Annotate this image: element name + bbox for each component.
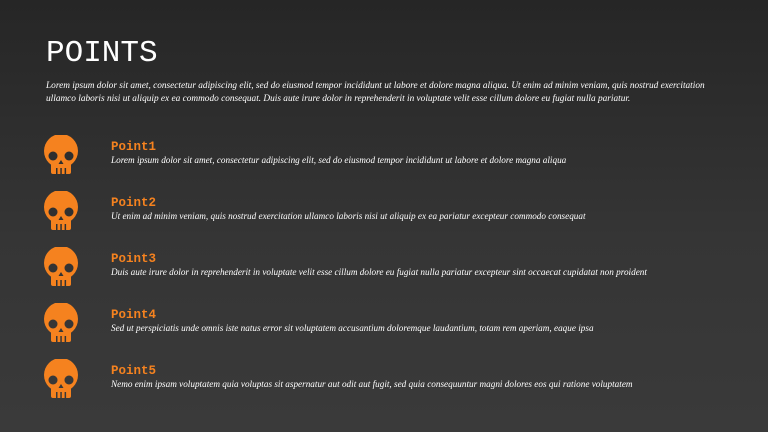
point 2: Point2	[111, 196, 156, 210]
point 5: Nemo enim ipsam voluptatem quia voluptas sit aspernatur aut odit aut fugit, sed quia consequuntur magni dolores eos qui ratione voluptatem	[111, 379, 633, 389]
point 4: Point4	[111, 308, 156, 322]
point 1: Lorem ipsum dolor sit amet, consectetur adipiscing elit, sed do eiusmod tempor incididunt ut labore et dolore magna aliqua	[111, 155, 566, 165]
point 1	[44, 135, 566, 174]
point 3	[44, 247, 648, 286]
point 4: Sed ut perspiciatis unde omnis iste natus error sit voluptatem accusantium doloremque laudantium, totam rem aperiam, eaque ipsa	[111, 323, 594, 333]
point 3: Duis aute irure dolor in reprehenderit in voluptate velit esse cillum dolore eu fugiat nulla pariatur excepteur sint occaecat cupidatat non proident	[111, 267, 647, 277]
icon: skull	[44, 135, 78, 174]
point 1: Point1	[111, 140, 156, 154]
icon: skull	[44, 191, 78, 230]
point 5	[44, 359, 633, 398]
point 3: Point3	[111, 252, 156, 266]
intro text: Lorem ipsum dolor sit amet, consectetur adipiscing elit, sed do eiusmod tempor incididunt ut labore et dolore magna aliqua. Ut enim ad minim veniam, quis nostrud exercitation ullamco laboris nisi ut aliquip ex ea commodo consequat. Duis aute irure dolor in reprehenderit in voluptate velit esse cillum dolore eu fugiat nulla pariatur.	[46, 81, 705, 104]
point 5: Point5	[111, 364, 156, 378]
point 2: Ut enim ad minim veniam, quis nostrud exercitation ullamco laboris nisi ut aliquip ex ea pariatur excepteur commodo consequat	[111, 211, 586, 221]
icon: skull	[44, 359, 78, 398]
icon: skull	[44, 247, 78, 286]
point 2	[44, 191, 586, 230]
title: POINTS	[46, 36, 158, 71]
point 4	[44, 303, 594, 342]
icon: skull	[44, 303, 78, 342]
